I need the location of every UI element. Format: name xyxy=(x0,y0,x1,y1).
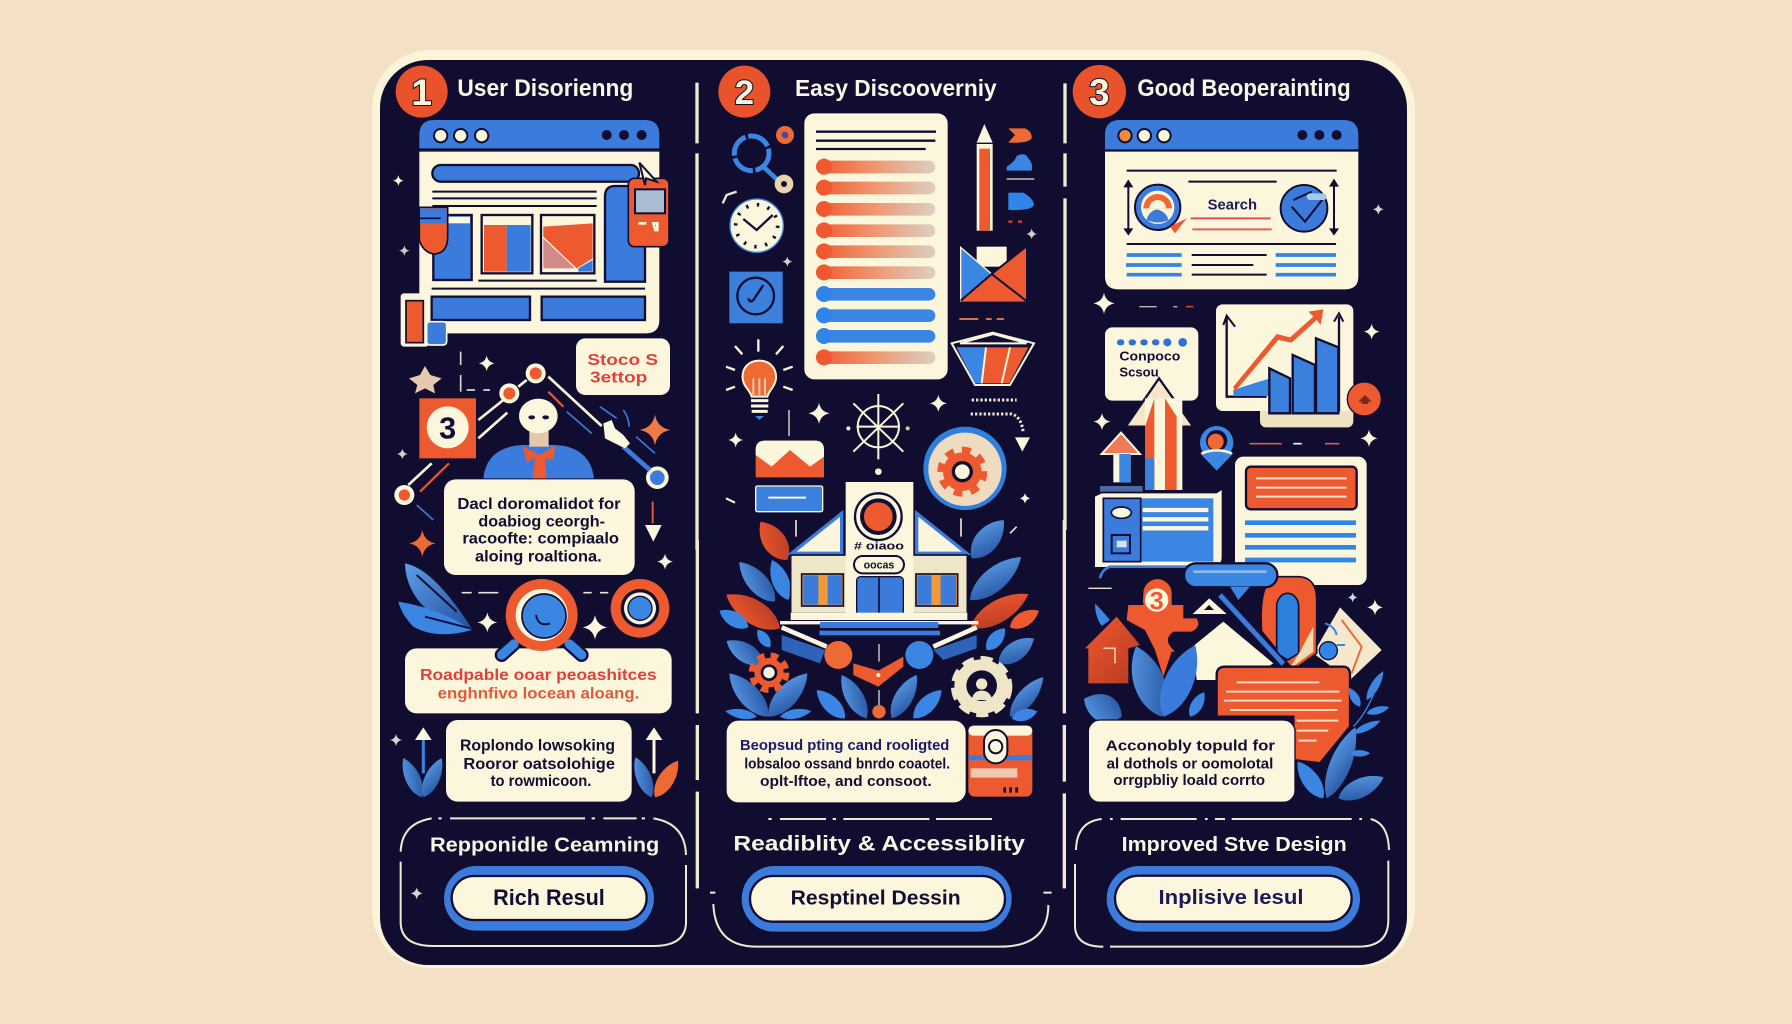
text card: racoofte: compiaalo xyxy=(462,530,619,547)
heading: easy discovery: Easy Discooverniy xyxy=(795,75,997,101)
leaves left xyxy=(398,563,472,634)
result pill xyxy=(742,866,1012,932)
icon: sparkle scribble and arrow xyxy=(971,400,1030,452)
building: # oiaoo xyxy=(854,540,905,552)
red text card xyxy=(405,648,672,713)
bottom frame xyxy=(1075,819,1389,947)
illustration cluster xyxy=(1085,567,1383,683)
browser window xyxy=(419,120,659,333)
result pill: Inplisive lesul xyxy=(1158,886,1303,909)
bottom frame xyxy=(710,819,1052,947)
icon: card with fingerprint xyxy=(968,726,1032,797)
document left xyxy=(1095,486,1222,567)
leaves around house xyxy=(716,513,1050,724)
icon: wheel xyxy=(846,394,910,474)
icon: mail card xyxy=(756,441,824,477)
connector network xyxy=(394,363,669,520)
heading: user disorienng: User Disorienng xyxy=(457,75,633,102)
text card: doabiog ceorgh- xyxy=(478,514,605,531)
badge 2 xyxy=(718,66,770,118)
connector ornament xyxy=(796,518,1017,718)
small sparkles xyxy=(1093,204,1384,447)
text card xyxy=(446,720,632,802)
icon: basket xyxy=(952,333,1034,385)
arrow down xyxy=(645,502,662,542)
text card: orrgpbliy loald corrto xyxy=(1113,773,1265,789)
badge 1 xyxy=(396,66,448,118)
dashes and sparkles xyxy=(390,554,673,899)
leaves right xyxy=(1291,669,1390,807)
icon: clock xyxy=(723,192,783,252)
text card: to rowmicoon. xyxy=(491,773,591,790)
icon: round home badge xyxy=(1347,382,1381,416)
panel frame xyxy=(372,50,1415,968)
target icon xyxy=(611,579,669,638)
column divider xyxy=(692,540,702,888)
result pill: Rich Resul xyxy=(493,885,605,910)
text card xyxy=(444,479,635,575)
red text card: Roadpable ooar peoashitces xyxy=(420,667,657,684)
icon: number 3 tile: 3 xyxy=(439,411,456,445)
sparkles xyxy=(726,257,1030,504)
building xyxy=(780,482,978,663)
illustration cluster: 3 xyxy=(1150,587,1164,615)
sticky note: Stoco S xyxy=(587,352,658,369)
badge 2: 2 xyxy=(735,74,754,112)
document right xyxy=(1235,457,1367,585)
heading: improved: Improved Stve Design xyxy=(1122,833,1347,856)
text card: Roplondo lowsoking xyxy=(460,738,615,755)
bottom frame xyxy=(401,818,686,946)
icon: number 3 tile xyxy=(419,398,476,458)
small card xyxy=(1105,327,1198,401)
badge 1: 1 xyxy=(411,71,432,113)
icon: checkbox xyxy=(729,272,783,323)
speech bubble xyxy=(1184,563,1277,600)
growth chart xyxy=(1216,304,1353,427)
orange note xyxy=(1217,667,1350,763)
text card: al dothols or oomolotal xyxy=(1107,756,1273,772)
person xyxy=(483,399,594,478)
sparkles and lines xyxy=(393,175,670,557)
column divider xyxy=(1059,520,1069,888)
icon: big up arrow xyxy=(1126,378,1193,490)
red text card: enghnfivo locean aloang. xyxy=(438,685,639,702)
icon: light bulb xyxy=(726,339,793,420)
text card: aloing roaltiona. xyxy=(475,549,602,566)
heading: result: Repponidle Ceamning xyxy=(430,834,659,857)
icon: phone with cursor xyxy=(628,163,669,247)
browser search window: Search xyxy=(1208,197,1257,213)
column 2 lower xyxy=(710,482,1052,947)
left sprout xyxy=(397,727,448,800)
small card: Scsou xyxy=(1119,364,1159,379)
icon: magnifier xyxy=(734,126,794,193)
icon: small up arrow xyxy=(1102,433,1140,482)
column 1 upper xyxy=(393,66,697,575)
text card: Dacl doromalidot for xyxy=(457,496,621,513)
badge 3 xyxy=(1073,65,1126,118)
text card xyxy=(727,721,966,802)
right sprout xyxy=(629,727,685,802)
text card: lobsaloo ossand bnrdo coaotel. xyxy=(744,756,950,772)
column 3 upper xyxy=(1065,65,1384,585)
magnifier icon xyxy=(502,579,582,655)
icons: small stack xyxy=(1007,128,1037,239)
icon: gear globe xyxy=(923,427,1007,510)
building: oocas xyxy=(864,559,894,571)
column divider xyxy=(692,83,702,550)
column 1 lower xyxy=(390,540,697,946)
text card: Acconobly topuld for xyxy=(1106,739,1275,755)
text card: Rooror oatsolohige xyxy=(463,756,615,773)
sticky note: 3ettop xyxy=(590,369,647,386)
icon: left tag xyxy=(419,207,448,254)
icon: user gear xyxy=(954,659,1010,715)
icon: pencil xyxy=(977,124,993,231)
text card xyxy=(1088,720,1295,802)
leaves left xyxy=(1078,639,1209,729)
column divider xyxy=(1060,83,1070,530)
icon: blue bar xyxy=(756,486,823,512)
icon: location pin xyxy=(1200,426,1233,471)
icon: small document xyxy=(401,293,447,347)
badge 3: 3 xyxy=(1089,72,1110,113)
heading: readability: Readiblity & Accessiblity xyxy=(733,832,1025,856)
list document xyxy=(804,113,948,379)
result pill xyxy=(444,866,654,931)
icon: envelope xyxy=(961,247,1026,302)
dashes xyxy=(959,316,1004,322)
icon: star xyxy=(409,366,442,393)
icon: orange gear xyxy=(752,656,786,689)
text card: oplt-lftoe, and consoot. xyxy=(760,774,932,790)
column 2 upper xyxy=(718,66,1037,512)
text card: Beopsud pting cand rooligted xyxy=(740,738,949,754)
result pill xyxy=(1107,866,1360,932)
small card: Conpoco xyxy=(1119,348,1180,363)
sticky note xyxy=(576,338,670,395)
column 3 lower xyxy=(1064,520,1390,947)
browser search window xyxy=(1105,120,1358,289)
heading: good: Good Beoperainting xyxy=(1137,75,1351,102)
result pill: Resptinel Dessin xyxy=(791,886,961,909)
